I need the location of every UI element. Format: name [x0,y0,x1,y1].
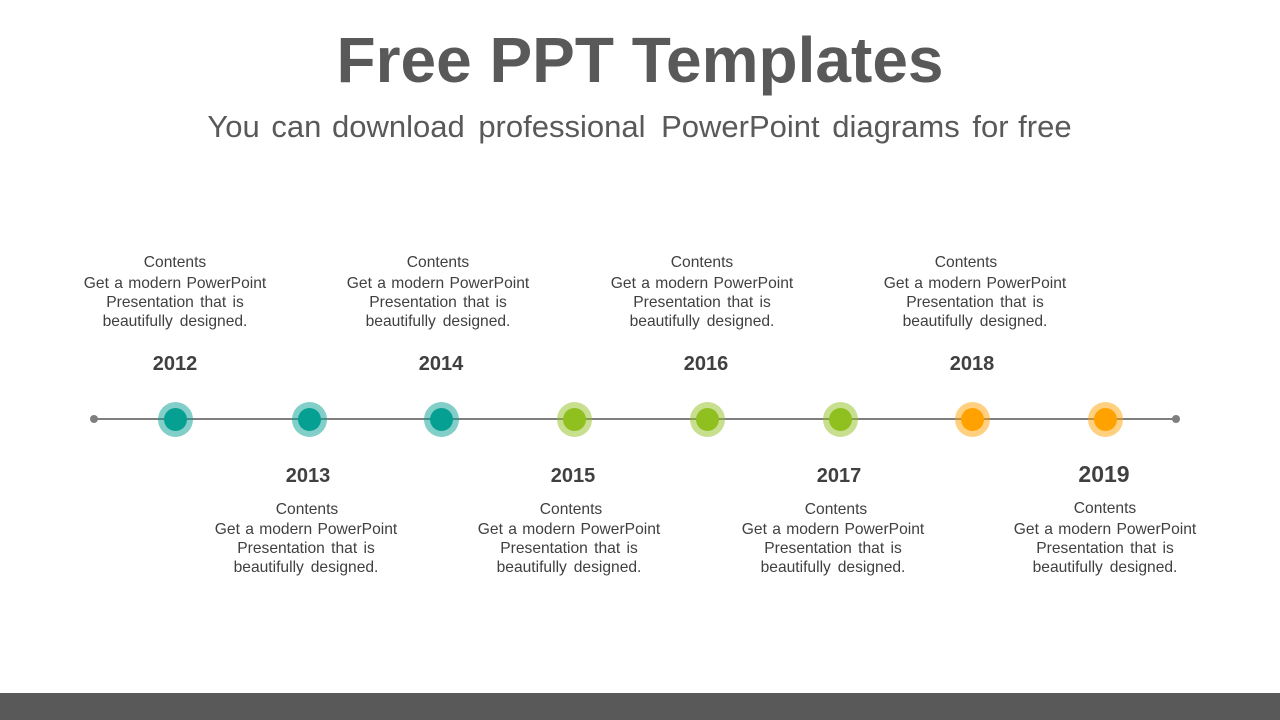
text block 2019: Contents [1074,500,1136,517]
text block 2014 [347,254,530,330]
text block 2019: Presentation that is [1036,540,1174,557]
text block 2013: beautifully designed. [234,559,378,576]
year 2018: 2018 [950,353,994,375]
text block 2014: Presentation that is [369,294,507,311]
marker 2013 [292,402,327,437]
year 2019: 2019 [1078,461,1130,487]
text block 2017: Get a modern PowerPoint [742,521,924,538]
text block 2012: beautifully designed. [103,313,247,330]
text block 2015: Presentation that is [500,540,638,557]
text block 2014: beautifully designed. [366,313,510,330]
text block 2018 [884,254,1066,330]
year 2014: 2014 [419,353,463,375]
text block 2015: Contents [540,501,602,518]
text block 2018: Presentation that is [906,294,1044,311]
year 2012: 2012 [153,353,197,375]
text block 2018: Get a modern PowerPoint [884,275,1066,292]
text block 2013: Get a modern PowerPoint [215,521,397,538]
marker 2015 [557,402,592,437]
marker 2012 [158,402,193,437]
text block 2019: Get a modern PowerPoint [1014,521,1196,538]
title: Free PPT Templates [336,24,944,96]
text block 2016: Get a modern PowerPoint [611,275,793,292]
text block 2014: Contents [407,254,469,271]
timeline start dot [90,415,98,423]
text block 2014: Get a modern PowerPoint [347,275,529,292]
subtitle: You can download professional PowerPoint diagrams for free [207,109,1072,144]
year 2016: 2016 [684,353,728,375]
marker 2016 [690,402,725,437]
marker 2018 [955,402,990,437]
text block 2018: Contents [935,254,997,271]
text block 2017 [742,501,924,576]
text block 2016 [611,254,794,330]
marker 2019 [1088,402,1123,437]
text block 2012: Get a modern PowerPoint [84,275,266,292]
text block 2019 [1014,500,1196,576]
text block 2019: beautifully designed. [1033,559,1177,576]
marker 2014 [424,402,459,437]
text block 2015: Get a modern PowerPoint [478,521,660,538]
text block 2017: Contents [805,501,867,518]
text block 2012: Contents [144,254,206,271]
text block 2013: Presentation that is [237,540,375,557]
text block 2012: Presentation that is [106,294,244,311]
marker 2017 [823,402,858,437]
text block 2017: Presentation that is [764,540,902,557]
footer bar [0,693,1280,720]
text block 2015 [478,501,660,576]
text block 2016: Presentation that is [633,294,771,311]
text block 2018: beautifully designed. [903,313,1047,330]
text block 2016: beautifully designed. [630,313,774,330]
timeline end dot [1172,415,1180,423]
text block 2017: beautifully designed. [761,559,905,576]
text block 2012 [84,254,266,330]
text block 2015: beautifully designed. [497,559,641,576]
year 2013: 2013 [286,465,330,487]
year 2015: 2015 [551,465,595,487]
text block 2013: Contents [276,501,338,518]
timeline line [94,418,1176,420]
year 2017: 2017 [817,465,861,487]
text block 2016: Contents [671,254,733,271]
text block 2013 [215,501,398,576]
